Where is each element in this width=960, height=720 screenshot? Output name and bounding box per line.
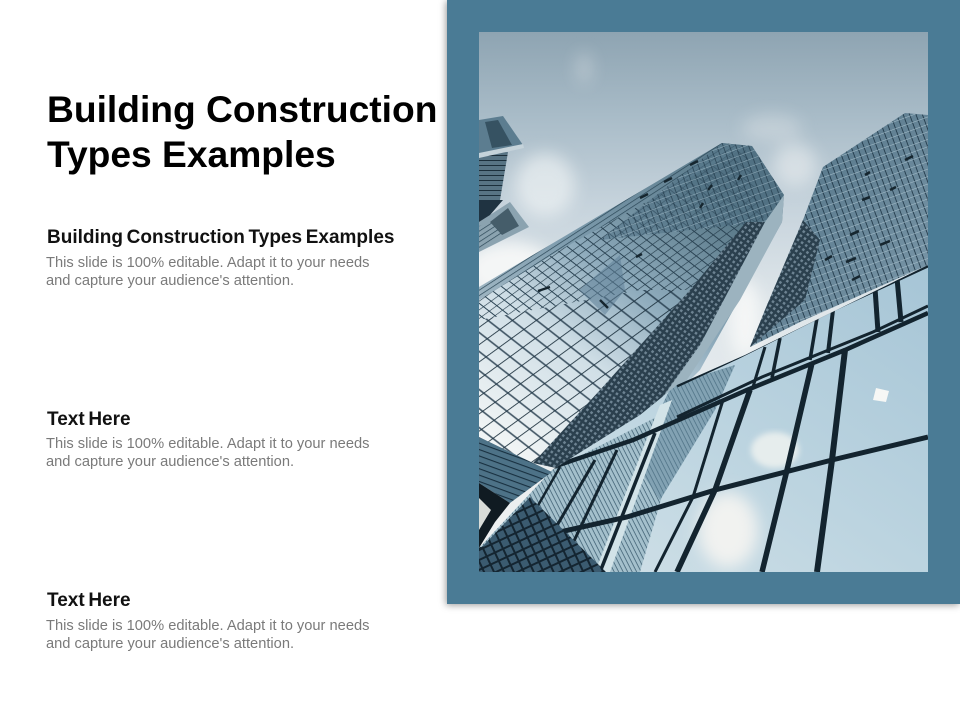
right tower xyxy=(750,113,928,347)
window marks xyxy=(538,161,741,308)
reflected towers in wall xyxy=(480,418,662,572)
panel: teal photo frame xyxy=(447,0,960,604)
grid: fine mid facade xyxy=(479,147,765,320)
sky xyxy=(479,32,928,572)
title xyxy=(47,88,437,175)
body text 1: This slide is 100% editable. Adapt it to your needs xyxy=(46,255,369,271)
glass panes xyxy=(479,265,928,572)
body text 2 xyxy=(46,436,369,470)
tower shadow reflection xyxy=(533,222,765,470)
title: Building Construction xyxy=(47,88,437,130)
body text 3: and capture your audience's attention. xyxy=(46,636,294,652)
title: Types Examples xyxy=(47,133,336,175)
text block: text here 2 xyxy=(46,590,369,652)
grid: lower bright facade xyxy=(479,290,690,463)
body text 3 xyxy=(46,618,369,652)
photo: glass skyscrapers xyxy=(479,32,928,572)
reflected clouds xyxy=(698,492,758,568)
lower left block xyxy=(479,437,606,572)
fine stripes: upper facade xyxy=(479,143,745,300)
subheading 2: Text Here xyxy=(47,409,131,430)
subheading 1: Building Construction Types Examples xyxy=(47,227,394,248)
text block: text here 1 xyxy=(46,409,369,470)
body text 2: and capture your audience's attention. xyxy=(46,454,294,470)
body text 1: and capture your audience's attention. xyxy=(46,273,294,289)
left tower xyxy=(479,116,529,252)
body text 3: This slide is 100% editable. Adapt it to your needs xyxy=(46,618,369,634)
body text 2: This slide is 100% editable. Adapt it to your needs xyxy=(46,436,369,452)
text block: building construction types xyxy=(46,227,394,289)
main tower xyxy=(479,143,784,470)
glass curtain wall xyxy=(479,265,928,572)
subheading 3: Text Here xyxy=(47,590,131,611)
clouds xyxy=(465,52,817,360)
body text 1 xyxy=(46,255,369,289)
mullions xyxy=(479,266,928,572)
